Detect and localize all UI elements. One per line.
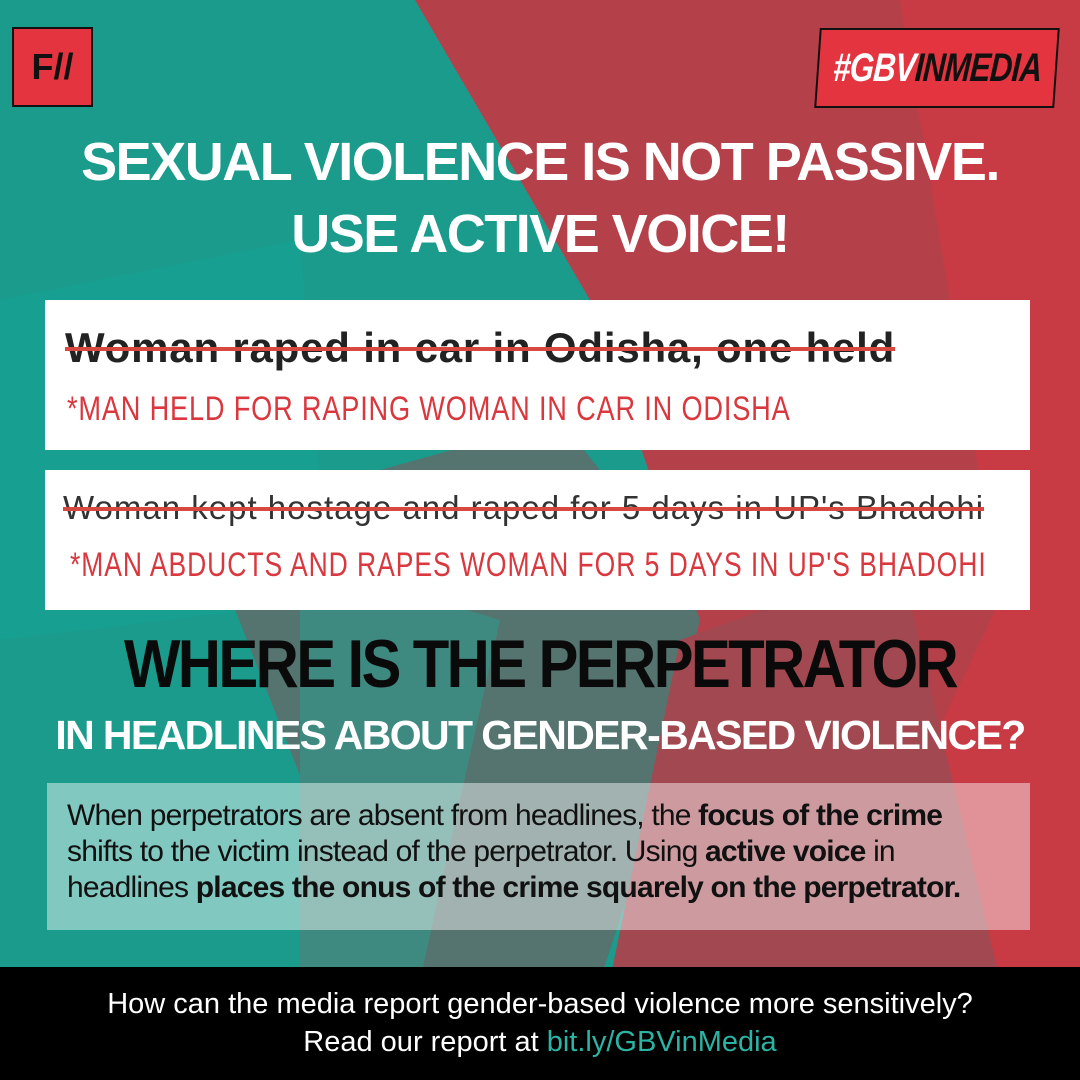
subheading: IN HEADLINES ABOUT GENDER-BASED VIOLENCE? [55, 712, 1025, 758]
logo: #GBVINMEDIA: #GBVINMEDIA [831, 46, 1043, 90]
footer: Read our report at bit.ly/GBVinMedia [303, 1026, 777, 1058]
struck headline 1: Woman raped in car in Odisha, one held [65, 324, 895, 371]
corrected headline 1: *MAN HELD FOR RAPING WOMAN IN CAR IN ODISHA [67, 390, 791, 428]
struck headline 2: Woman kept hostage and raped for 5 days in UP's Bhadohi [63, 489, 984, 526]
title: USE ACTIVE VOICE! [291, 204, 789, 264]
title [81, 132, 999, 264]
panel: headline 1 [45, 300, 1030, 450]
text block: shifts to the victim instead of the perpetrator. Using active voice in [67, 835, 895, 868]
heading: where is the perpetrator: WHERE IS THE PERPETRATOR [124, 626, 956, 702]
text block: When perpetrators are absent from headlines, the focus of the crime [67, 799, 942, 832]
logo: F//: F// [32, 46, 74, 87]
footer: How can the media report gender-based violence more sensitively? [107, 988, 973, 1020]
corrected headline 2: *MAN ABDUCTS AND RAPES WOMAN FOR 5 DAYS IN UP'S BHADOHI [70, 546, 987, 584]
title: SEXUAL VIOLENCE IS NOT PASSIVE. [81, 132, 999, 192]
logo: #GBVINMEDIA [814, 28, 1060, 108]
footer [0, 967, 1080, 1080]
text block [47, 783, 1030, 930]
panel: headline 2 [45, 470, 1030, 610]
text block: headlines places the onus of the crime squarely on the perpetrator. [67, 871, 960, 904]
logo: F// [12, 27, 93, 107]
